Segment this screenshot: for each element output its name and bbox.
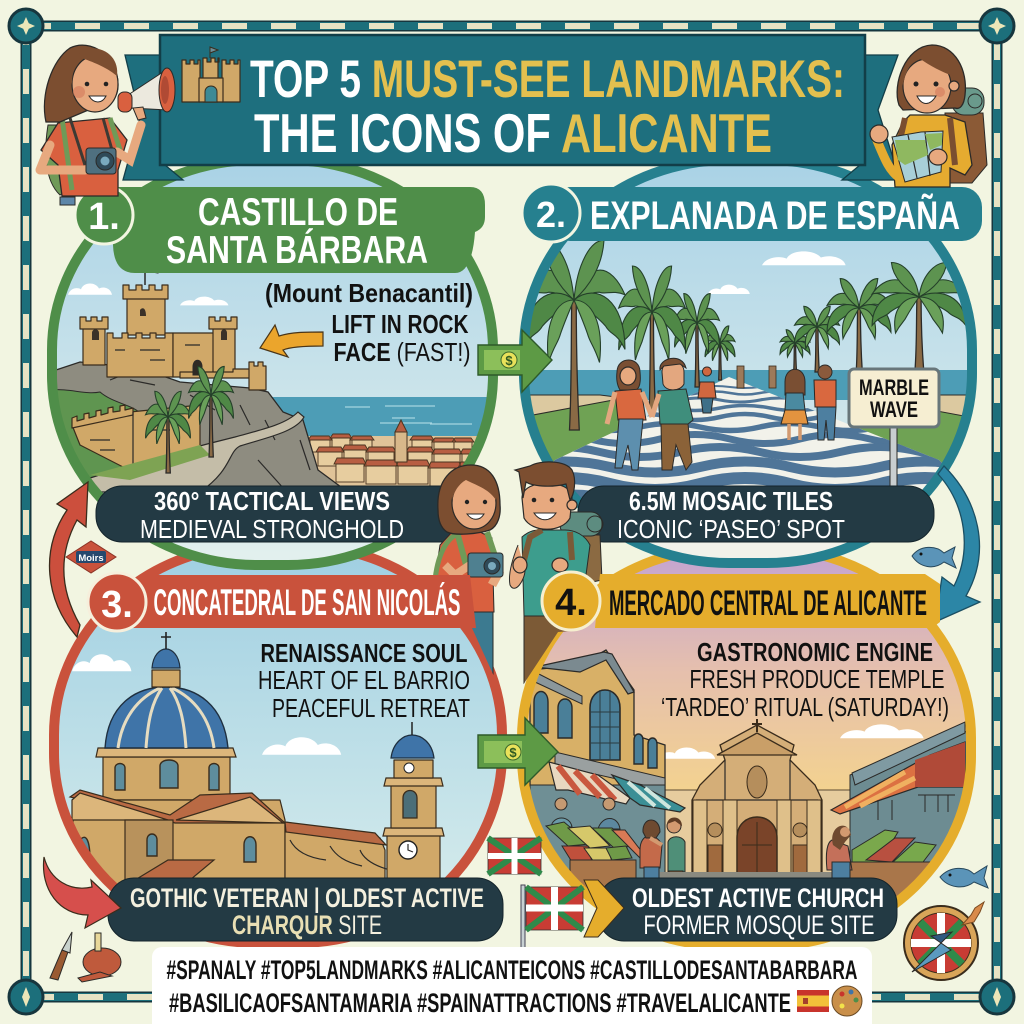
icon: candle and tools <box>50 932 121 982</box>
icon: lower basque flag <box>521 885 583 951</box>
arrow: money arrow between 3 and 4 <box>478 718 558 785</box>
arrow: red into concatedral caption <box>43 857 121 928</box>
icon: megaphone <box>118 68 175 120</box>
badge: 1: 1. <box>88 196 120 238</box>
road <box>90 412 304 492</box>
central couple of travellers <box>432 462 603 690</box>
caption: castillo: 360° TACTICAL VIEWS <box>154 486 390 516</box>
cliff <box>50 362 345 490</box>
icon: palette <box>832 986 862 1016</box>
caption: concatedral: GOTHIC VETERAN | OLDEST ACTIVE <box>130 883 484 913</box>
badge: 1 <box>75 186 133 244</box>
panel: castillo scene <box>47 160 500 570</box>
arrow: red curved up to castillo <box>50 482 88 637</box>
concatedral text notes: RENAISSANCE SOUL <box>260 638 468 668</box>
caption: explanada <box>578 486 934 544</box>
character: woman with map <box>870 45 987 187</box>
distant walkers <box>698 366 776 413</box>
panel: concatedral scene <box>59 559 497 884</box>
arrow: money arrow between 1 and 2: $ <box>505 353 513 368</box>
header: concatedral <box>125 575 476 628</box>
concatedral text notes <box>258 638 470 723</box>
badge: 4 <box>542 572 600 630</box>
church facade <box>660 719 832 878</box>
icon: map <box>892 131 943 182</box>
badge: 3 <box>88 573 146 631</box>
character: woman with megaphone <box>40 45 175 205</box>
arrow: gold chevron <box>584 880 624 937</box>
castillo text notes: (Mount Benacantil) <box>265 278 473 308</box>
header: castillo: SANTA BÁRBARA <box>166 228 428 272</box>
mercado text notes <box>661 637 949 722</box>
castillo text notes: FACE (FAST!) <box>334 337 470 367</box>
title text <box>250 50 845 164</box>
title banner <box>123 35 900 180</box>
badge: 3: 3. <box>101 584 133 626</box>
caption: explanada: ICONIC ‘PASEO’ SPOT <box>617 514 845 544</box>
caption: mercado <box>598 878 897 941</box>
castle <box>80 260 266 390</box>
caption: concatedral <box>108 878 503 941</box>
marble wave sign <box>849 369 939 490</box>
header: concatedral: CONCATEDRAL DE SAN NICOLÁS <box>154 582 460 623</box>
marble wave sign: MARBLE <box>859 375 929 400</box>
dome building <box>96 632 236 800</box>
caption: concatedral: CHARQUR SITE <box>232 910 382 940</box>
panel: mercado scene <box>528 560 966 896</box>
icon: fish top <box>912 547 956 568</box>
market hall <box>530 650 665 800</box>
arrow: money arrow between 3 and 4: $ <box>509 745 517 760</box>
man with backpack <box>509 462 603 690</box>
right stall <box>826 722 970 900</box>
header: castillo <box>113 187 485 273</box>
caption: mercado: OLDEST ACTIVE CHURCH <box>632 883 884 913</box>
mosaic walkway <box>554 377 942 558</box>
panel: explanada scene <box>530 166 967 558</box>
circle outlines: castillo and explanada <box>52 160 972 565</box>
mercado text notes: GASTRONOMIC ENGINE <box>697 637 933 667</box>
header: castillo: CASTILLO DE <box>198 191 398 234</box>
arrow to lift <box>260 325 323 357</box>
icon: castle <box>182 47 240 102</box>
arrow: money arrow between 1 and 2 <box>478 330 552 392</box>
icon: basque compass <box>904 902 984 980</box>
concatedral text notes: PEACEFUL RETREAT <box>272 693 470 723</box>
couple from behind <box>781 365 836 440</box>
arrow: teal curved down to mercado <box>935 466 980 622</box>
metro sign <box>66 541 116 573</box>
badge: 4: 4. <box>555 582 587 624</box>
header: explanada <box>550 187 982 241</box>
castillo text notes: LIFT IN ROCK <box>332 309 469 339</box>
caption: explanada: 6.5M MOSAIC TILES <box>629 486 833 516</box>
palm row <box>523 240 966 430</box>
mercado text notes: FRESH PRODUCE TEMPLE <box>690 664 944 694</box>
header: mercado <box>595 574 940 628</box>
palm trees <box>146 366 233 473</box>
badge: 2: 2. <box>536 194 566 235</box>
left stalls and produce <box>530 762 685 900</box>
market shoppers <box>640 817 685 881</box>
icon: fish bottom <box>940 866 988 888</box>
badge: 2 <box>522 184 580 242</box>
caption: castillo: MEDIEVAL STRONGHOLD <box>140 514 404 544</box>
circle outlines: concatedral and mercado <box>54 545 971 946</box>
icon: upper basque flag <box>488 838 541 874</box>
lower wall <box>72 405 210 480</box>
couple walking <box>607 358 693 470</box>
caption: castillo <box>96 486 481 544</box>
caption: mercado: FORMER MOSQUE SITE <box>644 910 874 940</box>
church body <box>70 790 390 885</box>
hashtag panel <box>152 947 872 1024</box>
title text: THE ICONS OF ALICANTE <box>254 102 772 164</box>
woman with camera <box>432 465 503 690</box>
marble wave sign: WAVE <box>870 397 918 422</box>
town <box>308 419 477 486</box>
metro sign: Moirs <box>78 553 104 564</box>
bell tower <box>383 722 444 885</box>
castillo text notes <box>265 278 473 367</box>
title text: TOP 5 MUST-SEE LANDMARKS: <box>250 50 845 109</box>
concatedral text notes: HEART OF EL BARRIO <box>258 665 470 695</box>
icon: spain flag <box>797 990 829 1012</box>
